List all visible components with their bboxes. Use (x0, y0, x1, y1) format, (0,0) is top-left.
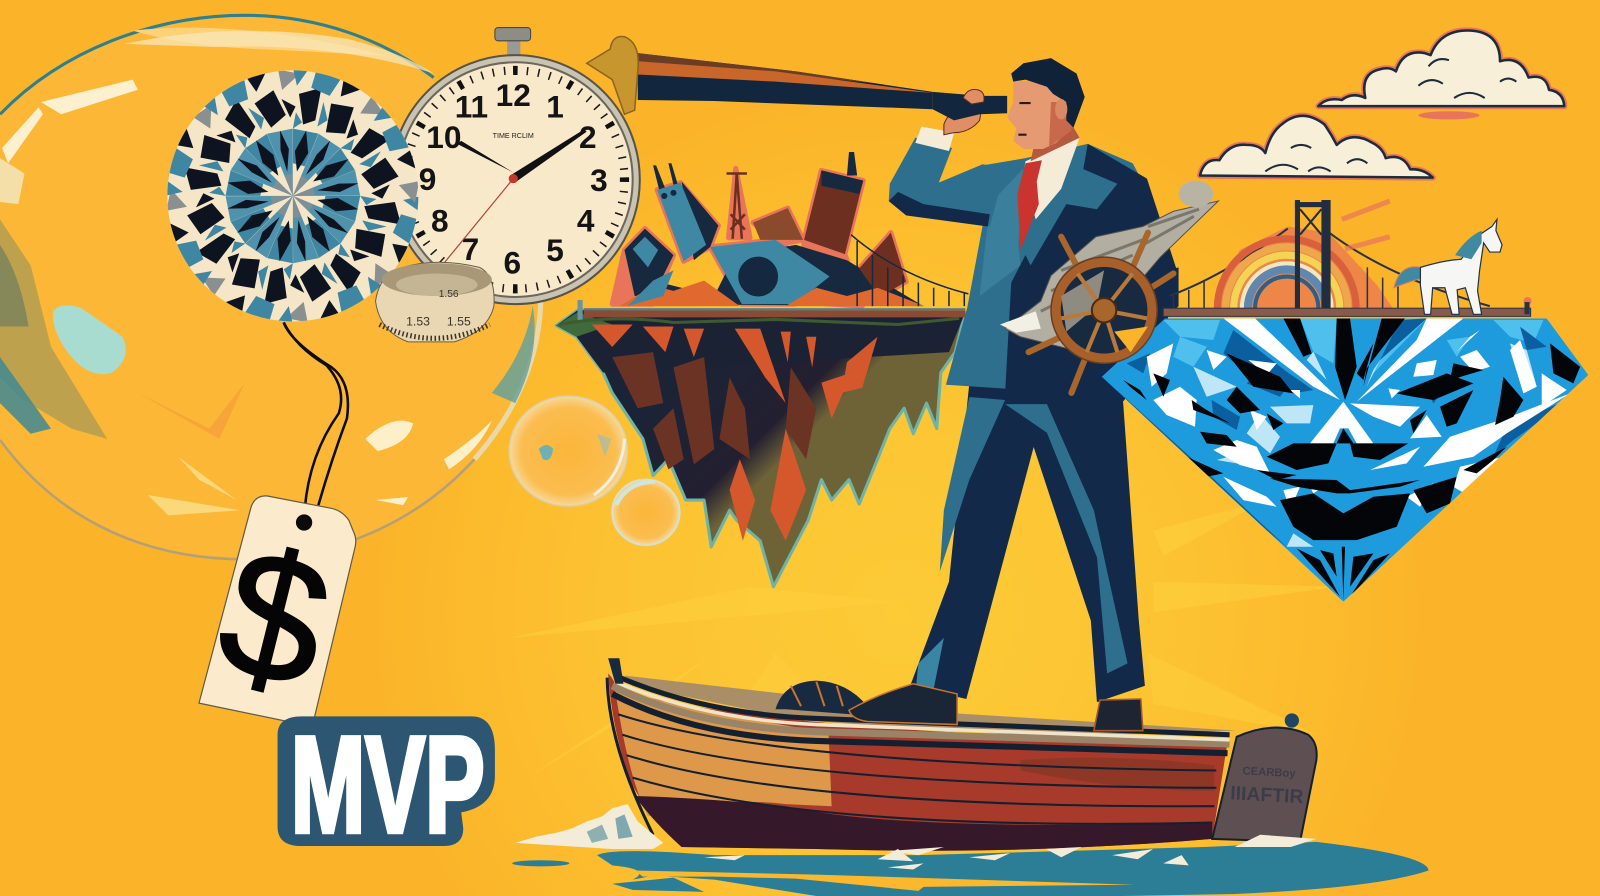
boat planks (618, 714, 1216, 824)
man hand and eyepiece (933, 89, 1007, 135)
man tie (1017, 160, 1042, 250)
clock hands (444, 130, 587, 263)
icon: top-view diamond (167, 70, 418, 322)
clock numerals: 7 (462, 231, 479, 267)
island debris city (612, 168, 906, 306)
clock numerals: 6 (503, 244, 521, 280)
tape markings: 1.53 (406, 315, 430, 329)
icon: ship wheel (1029, 233, 1173, 393)
icon: price tag (199, 496, 356, 728)
boat transom name (1230, 765, 1305, 808)
illustration: water (512, 842, 1429, 896)
icon: unicorn (1394, 219, 1502, 314)
clock numerals: 5 (546, 232, 564, 268)
clock numerals: 12 (496, 77, 531, 113)
icon: telescope (587, 36, 933, 114)
icon: large soap bubble (0, 15, 541, 559)
icon: stopwatch clock (391, 28, 640, 304)
man shoes (849, 684, 1143, 731)
clock numerals: 11 (455, 88, 488, 124)
island rock mass (556, 310, 965, 587)
clock brand text: TIME RCLIM (493, 132, 534, 140)
clock numerals: 10 (426, 119, 461, 155)
illustration: large blue diamond (1102, 318, 1588, 602)
clock numerals: 2 (579, 119, 597, 155)
illustration: foam (515, 804, 1316, 869)
island bridge cables (851, 235, 968, 306)
clock numerals (419, 77, 608, 280)
dollar sign: $ (202, 509, 347, 728)
boat deck (624, 676, 1237, 737)
boat transom (1212, 728, 1317, 842)
man jacket body (946, 144, 1179, 401)
illustration: crumbling floating island (556, 152, 968, 587)
clock numerals: 1 (546, 88, 564, 124)
boat coil of rope (776, 681, 867, 714)
icon: newspaper (1000, 181, 1218, 352)
icon: price tag strings (284, 322, 348, 520)
clock numerals: 3 (590, 162, 608, 198)
tape markings (406, 289, 471, 329)
icon: upper cloud (1318, 30, 1564, 119)
illustration: rainbow bridge (1163, 200, 1532, 316)
man cuff (915, 127, 954, 151)
man neck and head (1007, 58, 1085, 161)
clock numerals: 8 (431, 203, 449, 239)
clock numerals: 4 (577, 203, 595, 239)
icon: tape measure (376, 262, 494, 342)
icon: small bubbles (509, 396, 680, 545)
title: MVP: MVP (291, 708, 485, 861)
icon: lower cloud (1200, 116, 1433, 178)
boat transom name: CEARBoy (1242, 765, 1297, 780)
tape markings: 1.55 (447, 315, 471, 329)
man legs (910, 383, 1145, 702)
boat rail (612, 694, 1228, 753)
tape markings: 1.56 (439, 289, 459, 300)
man sleeve (889, 138, 1005, 227)
island brown roots (612, 352, 816, 469)
clock numerals: 9 (419, 161, 436, 197)
boat hull (608, 674, 1228, 851)
illustration: businessman (849, 58, 1179, 731)
boat transom name: IIIAFTIR (1230, 782, 1304, 808)
man shirt and collar (1023, 138, 1080, 219)
island deck (559, 300, 965, 325)
illustration: wooden boat (607, 658, 1317, 851)
title: MVP (278, 708, 495, 861)
island orange strata (592, 325, 878, 541)
